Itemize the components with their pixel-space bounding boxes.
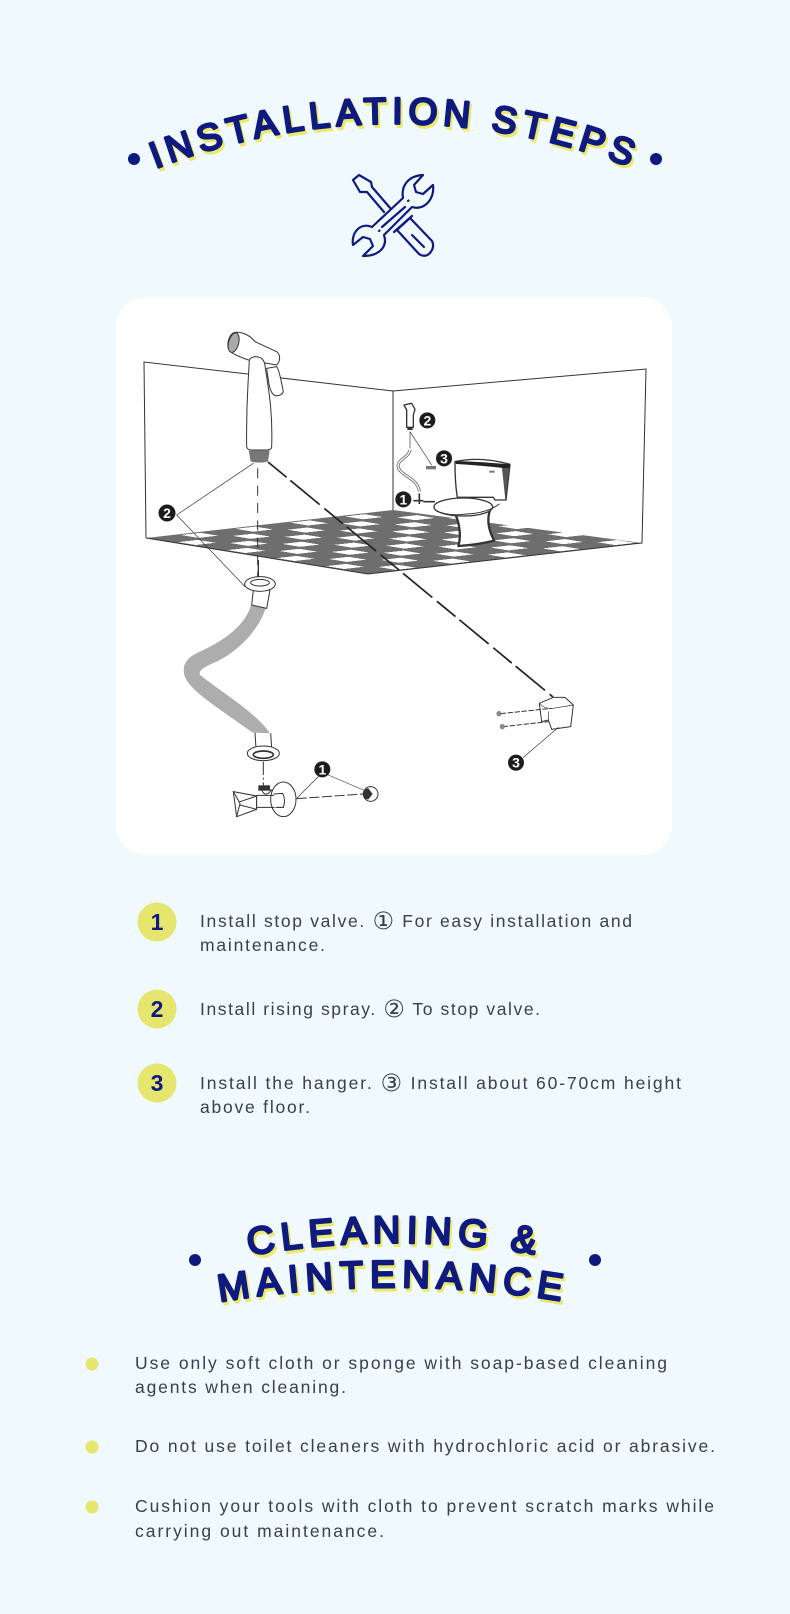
- heading: cleaning and maintenance: MAINTENANCE: [218, 1260, 564, 1302]
- heading: cleaning and maintenance: CLEANING &: [251, 1218, 538, 1258]
- step 3: above floor.: [200, 1097, 310, 1117]
- room with checkered floor: [144, 362, 646, 574]
- small valve: [413, 493, 435, 504]
- marker 2: 2: [163, 505, 171, 521]
- markers 1 2 3: 2: [423, 412, 431, 428]
- bullet 1: [86, 1353, 667, 1397]
- panel: installation diagram: [116, 297, 672, 855]
- small hose: [398, 450, 419, 492]
- upper nut: [245, 577, 275, 608]
- hose and stop valve: [184, 560, 378, 817]
- valve flange cap: [363, 787, 378, 801]
- braided hose: [184, 605, 270, 733]
- bullet 1: Use only soft cloth or sponge with soap-based cleaning: [135, 1353, 667, 1373]
- toilet: [434, 459, 510, 546]
- step 3: Install about 60-70cm height: [404, 1073, 681, 1093]
- step 1: ①: [373, 907, 394, 935]
- step 2: Install rising spray.: [200, 999, 375, 1019]
- title: installation steps: INSTALLATION STEPS: [148, 96, 636, 169]
- step 2: [138, 990, 540, 1028]
- bullet 3: Cushion your tools with cloth to prevent scratch marks while: [135, 1496, 714, 1516]
- bullet 3: [86, 1496, 714, 1541]
- dashed line to hanger: [268, 462, 553, 697]
- toilet scene: [395, 403, 510, 546]
- hanger: [496, 697, 573, 771]
- marker 2: [158, 504, 176, 522]
- lower nut: [247, 733, 279, 761]
- step 2: 2: [151, 996, 163, 1022]
- step 1: 1: [151, 909, 164, 935]
- bullet 3: carrying out maintenance.: [135, 1521, 384, 1541]
- marker 1: 1: [318, 761, 326, 777]
- markers 1 2 3: 1: [399, 491, 407, 507]
- markers 1 2 3: 3: [440, 450, 448, 466]
- step 1: Install stop valve.: [200, 911, 364, 931]
- heading: cleaning and maintenance: [189, 1215, 601, 1306]
- bullet 1: agents when cleaning.: [135, 1377, 346, 1397]
- step 3: ③: [380, 1069, 402, 1097]
- step 3: Install the hanger.: [200, 1073, 372, 1093]
- step 3: [138, 1064, 681, 1117]
- markers 1 2 3: [395, 412, 452, 507]
- title: installation steps: INSTALLATION STEPS: [155, 100, 638, 172]
- step 1: For easy installation and: [396, 911, 632, 931]
- step 2: To stop valve.: [406, 999, 540, 1019]
- valve: [233, 782, 296, 817]
- step 1: maintenance.: [200, 935, 325, 955]
- bullet 2: Do not use toilet cleaners with hydrochloric acid or abrasive.: [135, 1436, 715, 1456]
- marker 3: 3: [512, 755, 520, 771]
- marker 1: [314, 761, 330, 777]
- step 2: ②: [383, 995, 405, 1023]
- small spray: [404, 403, 415, 430]
- heading: cleaning and maintenance: CLEANING &: [247, 1215, 536, 1256]
- heading: cleaning and maintenance: MAINTENANCE: [223, 1262, 566, 1306]
- icon: crossed screwdriver and wrench: [353, 175, 433, 256]
- step 3: 3: [151, 1070, 163, 1096]
- step 1: [138, 902, 632, 955]
- hand spray exploded view: [177, 332, 283, 587]
